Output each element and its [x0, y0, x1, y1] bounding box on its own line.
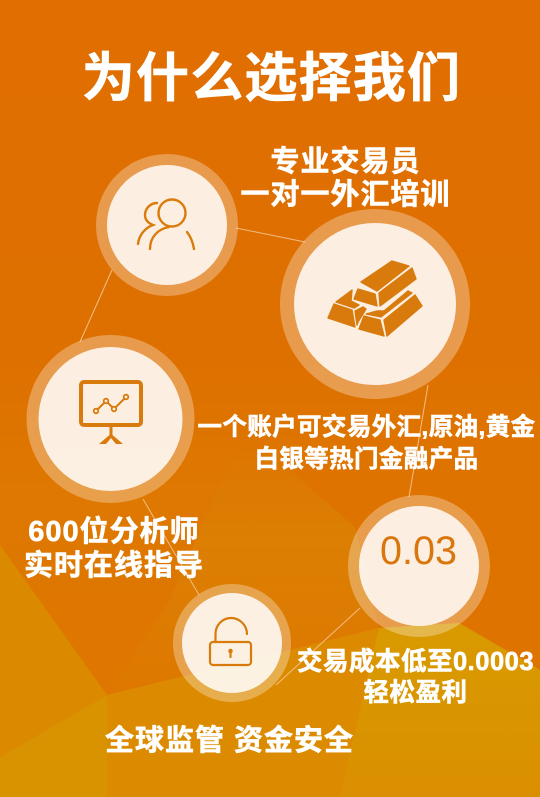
- circle: 0.03: [348, 495, 490, 637]
- icon: padlock: [210, 618, 251, 665]
- caption: analysts: [24, 515, 204, 582]
- caption: trader training: 专业交易员: [270, 146, 420, 178]
- caption: low cost: 轻松盈利: [363, 678, 468, 706]
- circle: padlock: [173, 584, 291, 702]
- circle: presentation chart: [26, 335, 194, 503]
- icon: people: [138, 200, 194, 249]
- caption: products: [197, 413, 536, 472]
- caption: trader training: [240, 145, 450, 211]
- caption: trader training: 一对一外汇培训: [240, 179, 450, 211]
- caption: regulation: 全球监管 资金安全: [105, 725, 354, 757]
- caption: analysts: 600位分析师: [28, 516, 200, 548]
- icon: presentation board: [81, 382, 141, 444]
- circle: gold bars: [280, 209, 470, 399]
- caption: products: 白银等热门金融产品: [254, 446, 479, 472]
- caption: low cost: [297, 647, 534, 706]
- title: 为什么选择我们: [82, 49, 461, 108]
- icon: gold bars: [328, 261, 422, 336]
- number: 0.03: 0.03: [380, 529, 457, 573]
- caption: analysts: 实时在线指导: [24, 550, 204, 582]
- caption: low cost: 交易成本低至0.0003: [297, 648, 534, 676]
- caption: products: 一个账户可交易外汇,原油,黄金: [197, 414, 536, 441]
- circle: people: [96, 154, 238, 296]
- connecting lines between circles: [80, 228, 428, 685]
